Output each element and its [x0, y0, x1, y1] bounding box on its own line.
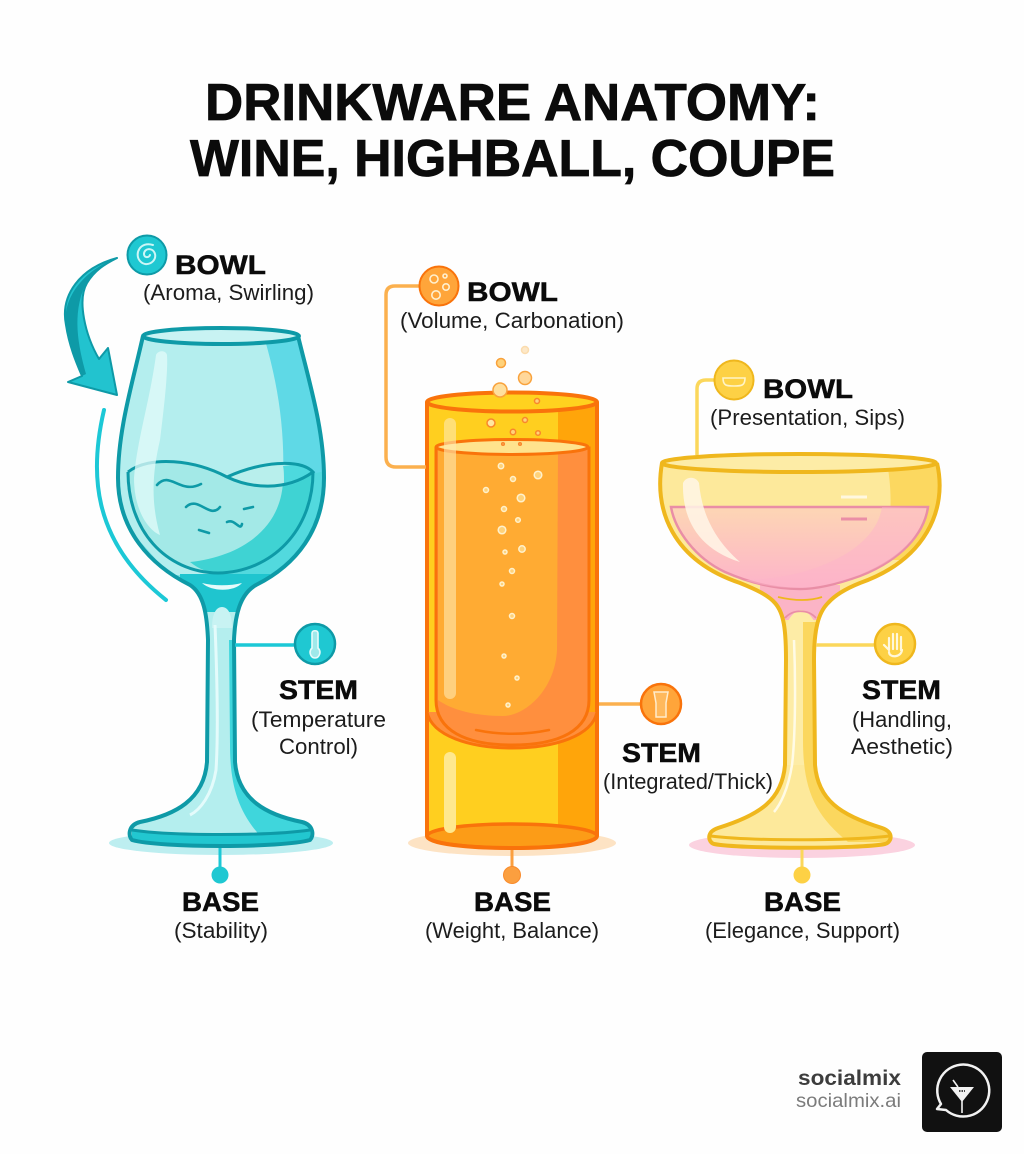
coupe stem icon and connector: [816, 624, 915, 664]
wine bowl label: BOWL: [175, 250, 266, 280]
panel: highball glass: [386, 266, 773, 943]
wine base label: [174, 887, 268, 943]
title: WINE, HIGHBALL, COUPE: [190, 130, 835, 188]
wine base shadow: [109, 831, 333, 855]
highball base label: BASE: [474, 887, 551, 917]
brand logo: [922, 1052, 1002, 1132]
highball base shadow: [408, 830, 616, 856]
wine glass body: [110, 328, 330, 850]
brand text: socialmix: [798, 1067, 901, 1090]
panel: coupe glass: [650, 360, 953, 943]
highball bowl icon and connector: [386, 266, 458, 467]
highball bowl label: (Volume, Carbonation): [400, 308, 624, 333]
wine base connector: [212, 848, 228, 884]
wine base label: (Stability): [174, 918, 268, 943]
brand text: socialmix.ai: [796, 1090, 901, 1112]
wine stem label: (Temperature: [251, 707, 386, 732]
coupe glass body: [650, 454, 950, 855]
title: DRINKWARE ANATOMY:: [205, 74, 820, 132]
wine swirl arrow: [65, 258, 117, 395]
coupe base label: [705, 887, 900, 943]
coupe base label: BASE: [764, 887, 841, 917]
coupe bowl icon and connector: [697, 360, 754, 455]
highball stem label: STEM: [622, 738, 701, 768]
coupe bowl label: BOWL: [763, 374, 853, 404]
coupe stem label: Aesthetic): [851, 734, 953, 759]
highball stem icon and connector: [599, 684, 681, 724]
highball base connector: [504, 850, 520, 884]
wine bowl label: (Aroma, Swirling): [143, 280, 314, 305]
highball bubbles: [484, 346, 542, 707]
wine base label: BASE: [182, 887, 259, 917]
wine stem label: STEM: [279, 675, 358, 705]
coupe stem label: (Handling,: [852, 707, 952, 732]
coupe bowl label: [710, 374, 905, 430]
coupe base shadow: [689, 832, 915, 858]
coupe base connector: [794, 850, 810, 884]
highball bowl label: BOWL: [467, 277, 558, 307]
title: [190, 74, 835, 188]
highball base label: (Weight, Balance): [425, 918, 599, 943]
wine swirl arc: [97, 410, 166, 600]
wine bowl label: [143, 250, 314, 305]
coupe bowl label: (Presentation, Sips): [710, 405, 905, 430]
highball stem label: (Integrated/Thick): [603, 769, 773, 794]
panel: wine glass: [65, 236, 386, 943]
highball outer body: [427, 392, 597, 848]
coupe stem label: STEM: [862, 675, 941, 705]
wine bowl icon: [128, 236, 166, 274]
highball base label: [425, 887, 599, 943]
highball stem label: [603, 738, 773, 794]
wine stem label: [251, 675, 386, 759]
coupe base label: (Elegance, Support): [705, 918, 900, 943]
coupe stem label: [851, 675, 953, 759]
wine stem connector and thermometer icon: [235, 624, 335, 664]
wine stem label: Control): [279, 734, 358, 759]
brand text: [796, 1067, 901, 1112]
highball bowl label: [400, 277, 624, 333]
highball inner liquid: [427, 418, 597, 748]
